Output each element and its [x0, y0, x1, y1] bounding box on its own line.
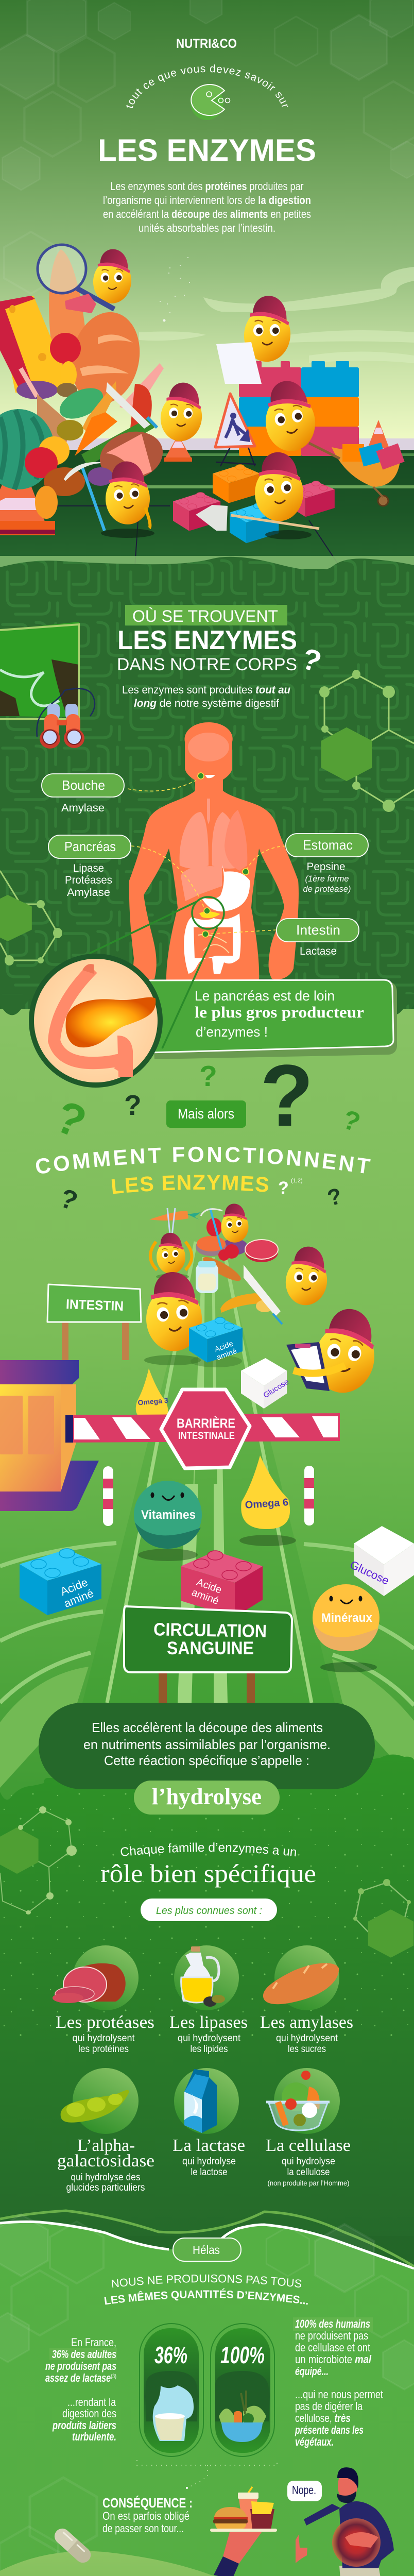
ball: vitamines [134, 1481, 202, 1561]
stat: 100%: 100% [220, 2342, 265, 2368]
enzyme: lactase [173, 2068, 245, 2178]
label: pancréas: Pancréas [64, 839, 116, 854]
pill: hélas [173, 2238, 241, 2261]
enzyme: protéases: les protéines [78, 2044, 129, 2055]
enzyme: alpha-galactosidase: qui hydrolyse des [71, 2172, 140, 2183]
enzyme: lipases: Les lipases [169, 2013, 248, 2032]
text: cellulase statistic: un microbiote mal [295, 2353, 372, 2366]
text: conséquence: CONSÉQUENCE : [102, 2495, 193, 2511]
question marks: ? [48, 1090, 93, 1148]
sign: barrière intestinale: INTESTINALE [178, 1431, 235, 1442]
label: intestin: Lactase [300, 945, 337, 957]
drop: omega 3 [136, 1368, 168, 1418]
body diagram [129, 722, 299, 982]
text: cellulase statistic: ne produisent pas [295, 2329, 368, 2342]
character: egg with shovel [196, 452, 319, 539]
road [82, 1242, 335, 1703]
character: egg with wheelbarrow [262, 379, 405, 506]
sign: barrière intestinale: BARRIÈRE [177, 1416, 235, 1431]
food pile [0, 249, 168, 519]
pill: les plus connues [141, 1899, 277, 1921]
brick: acide aminé (pink) [181, 1551, 263, 1617]
label: estomac: de protéase) [303, 884, 351, 894]
callout: pancreas: le plus gros producteur [195, 1003, 364, 1021]
stat: 36%: 36% [154, 2342, 187, 2368]
text: cellulase statistic: 100% des humains [295, 2317, 370, 2330]
heading tag: où se trouvent: OÙ SE TROUVENT [132, 607, 278, 625]
section background: enzyme families [0, 1754, 414, 2236]
label: pancréas: Amylase [67, 887, 110, 899]
enzyme: amylases [260, 1945, 353, 2055]
zoom lines and small ring [89, 897, 224, 1048]
label: intestin [277, 919, 359, 957]
label: pancréas [48, 835, 131, 899]
text: lactase statistic: produits laitiers [52, 2419, 116, 2432]
character: egg with blueprint [216, 294, 295, 384]
panel: hydrolyse text: Cette réaction spécifique s’appelle : [104, 1753, 309, 1768]
enzyme: lipases: qui hydrolysent [178, 2033, 241, 2044]
text: cellulase statistic: végétaux. [295, 2435, 334, 2448]
heading: comment fonctionnent: LES ENZYMES [111, 1175, 268, 1194]
enzyme: protéases: Les protéases [56, 2013, 154, 2032]
enzyme: cellulase: (non produite par l’Homme) [268, 2179, 349, 2187]
icon: traffic cones [0, 420, 389, 535]
sign: circulation sanguine: SANGUINE [167, 1638, 254, 1658]
brick: acide aminé (pink): Acide [195, 1577, 223, 1596]
brick: acide aminé (blue): aminé [62, 1587, 95, 1610]
intro text: Les enzymes sont des protéines produites par [110, 180, 304, 193]
callout: pancreas: d’enzymes ! [196, 1024, 268, 1040]
scattered bricks [173, 465, 335, 543]
curved tagline: tout ce que vous devez savoir sur [126, 64, 288, 108]
text: lactase statistic: turbulente. [72, 2430, 116, 2443]
character: egg with pickaxe [64, 462, 154, 538]
heading: les enzymes dans notre corps: LES ENZYMES [117, 625, 297, 655]
ball: minéraux: Minéraux [321, 1611, 373, 1625]
heading: rôle bien spécifique: rôle bien spécifique [100, 1859, 316, 1888]
pill: les plus connues: Les plus connues sont : [156, 1905, 262, 1917]
capsules [51, 2526, 107, 2576]
heading: comment fonctionnent: ? [278, 1178, 289, 1198]
text: lactase statistic: 36% des adultes [52, 2348, 116, 2361]
heading: comment fonctionnent: (1,2) [291, 1178, 303, 1184]
icon: enzyme pac-man [191, 84, 230, 120]
brick: acide aminé (blue top): aminé [215, 1347, 238, 1362]
panel: hydrolyse text: Elles accélèrent la découpe des aliments [92, 1720, 323, 1735]
drop: omega 6: Omega 6 [245, 1497, 289, 1511]
heading: comment fonctionnent: COMMENT FONCTIONNENT [36, 1147, 371, 1174]
question marks [48, 1047, 364, 1217]
section background: nous ne produisons pas [0, 2211, 414, 2576]
heading: les enzymes dans notre corps: DANS NOTRE CORPS [117, 655, 297, 674]
enzyme: cellulase: La cellulase [266, 2136, 351, 2155]
section background: hero sky [0, 0, 414, 438]
label: estomac: (1ère forme [305, 874, 349, 884]
tag: mais alors: Mais alors [178, 1106, 234, 1122]
enzyme: alpha-galactosidase: glucides particuliers [66, 2182, 145, 2193]
title: LES ENZYMES [98, 133, 316, 167]
text: cellulase statistic: de cellulase et ont [295, 2341, 370, 2354]
booth [0, 1360, 99, 1511]
icon: road works sign [215, 394, 256, 466]
heading: les enzymes dans notre corps: ? [298, 641, 325, 679]
sign: intestin [47, 1284, 141, 1360]
character: egg with saw [106, 380, 206, 444]
section: où se trouvent (labyrinth background) [0, 557, 414, 1016]
heading: rôle bien spécifique [100, 1842, 316, 1888]
question marks: ? [199, 1060, 217, 1093]
label: bouche [42, 774, 124, 814]
molecules [0, 674, 414, 960]
scene foods [149, 1208, 278, 1313]
bollards [103, 1466, 314, 1526]
question marks: ? [124, 1089, 142, 1121]
text: conséquence: de passer son tour... [102, 2522, 184, 2535]
characters: enzyme workers [144, 1204, 384, 1398]
horizon strip [0, 438, 414, 451]
enzyme: cellulase: la cellulose [287, 2167, 330, 2178]
callout: pancreas [144, 980, 397, 1059]
character: magnifier egg [38, 245, 134, 313]
text: lactase statistic: ne produisent pas [45, 2360, 116, 2372]
cube: glucose (bottom): Glucose [348, 1558, 391, 1587]
speech bubble: nope [287, 2481, 322, 2501]
sign: intestin: INTESTIN [66, 1296, 124, 1314]
text: lactase statistic: (3) [111, 2372, 116, 2380]
brick: acide aminé (blue top): Acide [213, 1339, 234, 1354]
heading: nous ne produisons pas: LES MÊMES QUANTITÉS D’ENZYMES... [104, 2289, 308, 2305]
molecule right [353, 1879, 413, 1958]
enzyme: protéases [53, 1945, 154, 2055]
enzyme: lipases [169, 1945, 248, 2055]
text: lactase statistic [45, 2336, 117, 2443]
heading: nous ne produisons pas [104, 2274, 308, 2305]
brick: acide aminé (pink): aminé [190, 1587, 220, 1607]
icon: map [0, 622, 79, 719]
label: estomac [286, 834, 368, 894]
label: intestin: Intestin [296, 922, 340, 938]
pill: l'hydrolyse: l’hydrolyse [152, 1783, 262, 1809]
text: lactase statistic: ...rendant la [67, 2396, 116, 2409]
text: tout au long [122, 684, 290, 709]
enzyme: lactase: La lactase [173, 2136, 245, 2155]
callout: pancreas: Le pancréas est de loin [195, 988, 335, 1004]
enzyme: lactase: qui hydrolyse [182, 2156, 236, 2167]
hill [0, 2551, 351, 2576]
pill: hélas: Hélas [193, 2243, 220, 2257]
stat: 36% [140, 2324, 203, 2456]
ball: minéraux [313, 1584, 380, 1672]
label: pancréas: Protéases [65, 874, 112, 886]
logo: Nutri&Co: NUTRI&CO [176, 37, 237, 51]
enzyme: protéases: qui hydrolysent [72, 2033, 135, 2044]
text: conséquence [102, 2495, 193, 2535]
sign: circulation sanguine: CIRCULATION [153, 1619, 267, 1641]
question marks: ? [260, 1047, 314, 1145]
intro text: unités absorbables par l’intestin. [139, 222, 275, 234]
sign: barrière intestinale [161, 1389, 250, 1468]
brick: acide aminé (blue) [20, 1549, 101, 1615]
cube: glucose (bottom) [348, 1526, 414, 1596]
enzyme: cellulase [266, 2068, 351, 2187]
icon: binoculars [37, 689, 95, 749]
section background: comment fonctionnent [0, 1009, 414, 1812]
enzyme: alpha-galactosidase: L’alpha- [77, 2136, 135, 2155]
brick: acide aminé (blue top) [189, 1317, 243, 1367]
label: estomac: Estomac [303, 837, 353, 853]
roundabout arcs [0, 1543, 414, 1788]
enzyme: amylases: Les amylases [260, 2013, 353, 2032]
text: cellulase statistic: équipé... [295, 2365, 329, 2378]
decorative hexagons [0, 0, 414, 294]
intro text: l’organisme qui interviennent lors de la digestion [103, 194, 311, 207]
panel: hydrolyse text: en nutriments assimilables par l’organisme. [83, 1737, 331, 1752]
speech bubble: nope: Nope. [292, 2483, 316, 2497]
intro text: en accélérant la découpe des aliments en petites [103, 208, 311, 221]
question marks: ? [339, 1105, 364, 1138]
heading: rôle bien spécifique: Chaque famille d’enzymes a un [120, 1842, 296, 1857]
markers [198, 773, 249, 937]
ball: vitamines: Vitamines [141, 1508, 196, 1522]
question marks: ? [56, 1183, 81, 1217]
question marks: ? [325, 1183, 344, 1211]
text: cellulase statistic: cellulose, très [295, 2412, 351, 2425]
brick wall [239, 361, 359, 456]
heading: comment fonctionnent [36, 1147, 371, 1198]
cube: glucose (top): Glucose [262, 1378, 290, 1400]
cube: glucose (top) [241, 1358, 290, 1409]
sparkle dots [160, 257, 190, 321]
label: pancréas: Lipase [73, 862, 104, 874]
illustration: fast-food tray [210, 2487, 277, 2576]
enzyme: amylases: qui hydrolysent [276, 2033, 338, 2044]
brick: acide aminé (blue): Acide [59, 1575, 90, 1598]
cloud wisps [139, 267, 414, 363]
enzyme: amylases: les sucres [288, 2044, 326, 2055]
illustration: pancreas close-up [31, 956, 160, 1085]
text: cellulase statistic: pas de digérer la [295, 2400, 363, 2413]
pill: l'hydrolyse [134, 1781, 280, 1815]
text: cellulase statistic: ...qui ne nous permet [295, 2388, 383, 2401]
panel: hydrolyse text [39, 1703, 375, 1789]
drop: omega 6 [239, 1455, 296, 1546]
dashed connectors [128, 781, 286, 934]
text: lactase statistic: digestion des [62, 2407, 116, 2420]
text: tout au long: Les enzymes sont produites tout au [122, 684, 290, 696]
label: bouche: Bouche [62, 777, 105, 793]
enzyme: cellulase: qui hydrolyse [282, 2156, 335, 2167]
molecule left [0, 1806, 77, 1914]
text: cellulase statistic: présente dans les [295, 2424, 364, 2436]
label: bouche: Amylase [61, 802, 105, 814]
tag: mais alors [166, 1100, 246, 1128]
text: conséquence: On est parfois obligé [102, 2510, 189, 2522]
barrier [65, 1413, 340, 1443]
ground [0, 450, 414, 569]
decorative hexagons [0, 2214, 414, 2576]
enzyme: lactase: le lactose [191, 2167, 228, 2178]
character: man refusing [296, 2467, 394, 2576]
dotted bracket [137, 2460, 277, 2489]
text: cellulase statistic [293, 2317, 383, 2448]
text: tout au long: long de notre système digestif [134, 698, 279, 709]
text: lactase statistic: En France, [71, 2336, 116, 2349]
drop: omega 3: Omega 3 [137, 1396, 168, 1407]
enzyme: alpha-galactosidase [57, 2068, 154, 2193]
label: estomac: Pepsine [307, 861, 345, 873]
heading: les enzymes dans notre corps [117, 625, 325, 679]
heading: nous ne produisons pas: NOUS NE PRODUISONS PAS TOUS [111, 2274, 302, 2287]
enzyme: lipases: les lipides [191, 2044, 228, 2055]
text: lactase statistic: assez de lactase [45, 2371, 134, 2384]
enzyme: alpha-galactosidase: galactosidase [57, 2151, 154, 2171]
sign: circulation sanguine [124, 1606, 292, 1704]
stat: 100% [211, 2324, 274, 2456]
intro text [103, 180, 311, 234]
